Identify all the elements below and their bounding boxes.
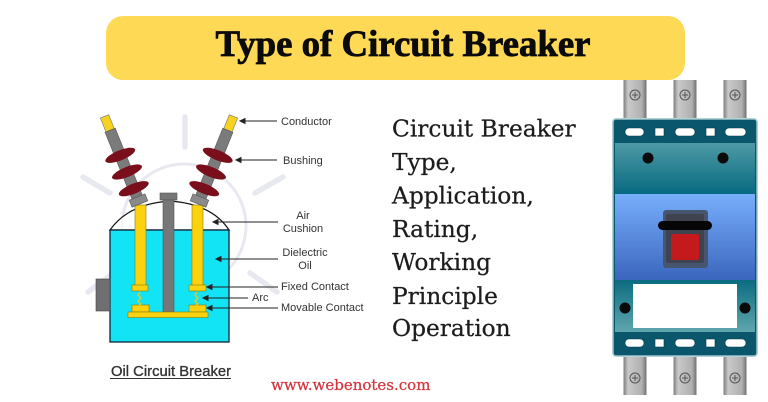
labels: Arc [252,292,269,304]
title: Type of Circuit Breaker [215,23,591,64]
side box [96,279,110,311]
text block: Principle [392,283,498,310]
arcs [138,292,198,305]
dome [110,201,229,230]
website url: www.webenotes.com [271,376,430,394]
labels: Bushing [283,155,323,167]
conductors and contacts [128,205,208,318]
right bushing [183,110,248,210]
terminals [624,80,746,395]
text block: Operation [392,315,511,342]
oil tank [110,230,229,342]
labels: Fixed Contact [281,281,349,293]
label plate [633,284,737,328]
labels: Conductor [281,116,332,128]
blue panel [615,194,755,280]
labels: Dielectric [282,247,328,259]
diagram caption: Oil Circuit Breaker [111,364,231,380]
slots [625,128,746,136]
labels: Air [296,210,310,222]
text block: Application, [391,182,534,210]
labels [203,116,364,314]
left bushing [90,110,155,210]
labels: Movable Contact [281,302,364,314]
text block: Rating, [392,216,478,243]
text block [391,116,577,342]
body [613,119,757,356]
text block: Type, [392,149,457,176]
watermark: light bulb [83,117,283,292]
labels: Oil [298,260,312,272]
text block: Circuit Breaker [392,116,577,142]
title banner [106,16,685,80]
labels: Cushion [283,223,323,235]
diagram: oil circuit breaker [90,110,248,342]
centre rod [160,193,177,312]
moulded case breaker [613,80,757,395]
screws [620,152,750,314]
text block: Working [392,249,491,276]
switch [658,210,712,268]
